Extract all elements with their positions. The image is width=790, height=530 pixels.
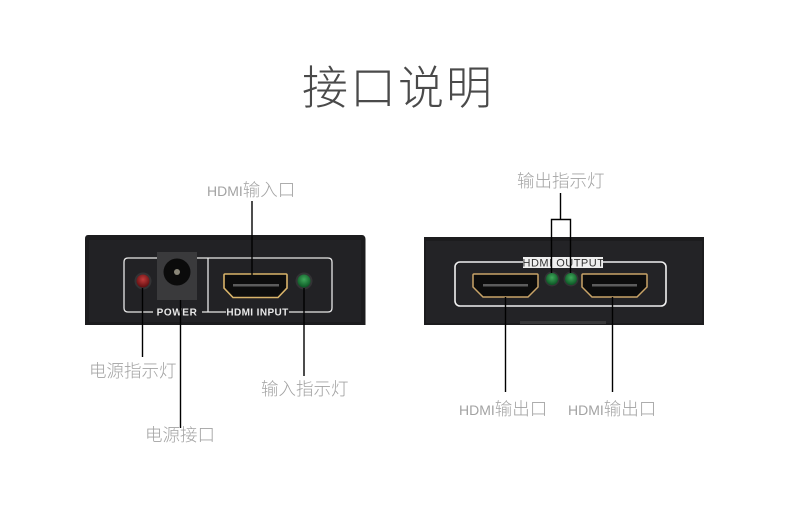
leader line: power LED bbox=[142, 288, 144, 357]
leader line: output port 2 bbox=[612, 297, 614, 392]
icon: HDMI output port 2 bbox=[582, 274, 647, 297]
panel outline bbox=[124, 258, 332, 312]
label: HDMI INPUT: HDMI INPUT bbox=[226, 308, 289, 318]
icon: HDMI output port 1 bbox=[473, 274, 538, 297]
icon: red power LED bbox=[134, 272, 152, 290]
icon: green input LED bbox=[296, 272, 312, 290]
label: HDMI OUTPUT: HDMI OUTPUT bbox=[523, 258, 604, 270]
leader bracket: output LEDs bbox=[552, 193, 570, 273]
icon: HDMI input port bbox=[224, 274, 287, 298]
icon: green output LED 1 bbox=[544, 272, 560, 286]
leader line: output port 1 bbox=[504, 297, 506, 392]
device face bbox=[89, 240, 361, 322]
leader line: HDMI input bbox=[251, 201, 253, 275]
label: power port: 电源接口 bbox=[145, 425, 215, 445]
device body bbox=[85, 235, 366, 325]
device body bbox=[424, 237, 704, 325]
leader line: power jack bbox=[180, 300, 182, 428]
panel: input side device bbox=[85, 235, 366, 325]
panel: output side device bbox=[424, 237, 704, 325]
leader line: input LED bbox=[303, 288, 305, 376]
panel outline bbox=[455, 262, 666, 306]
label: HDMI output port 1: HDMI输出口 bbox=[459, 399, 547, 419]
label: POWER: POWER bbox=[157, 308, 198, 318]
icon: power jack bbox=[157, 252, 197, 300]
label: HDMI input port: HDMI输入口 bbox=[207, 180, 295, 200]
bottom notch bbox=[520, 321, 606, 324]
label: output indicators: 输出指示灯 bbox=[517, 171, 604, 191]
title: 接口说明 bbox=[302, 62, 494, 114]
label: power indicator: 电源指示灯 bbox=[89, 361, 176, 381]
device face bbox=[426, 241, 702, 323]
label: HDMI output port 2: HDMI输出口 bbox=[568, 399, 656, 419]
icon: green output LED 2 bbox=[564, 272, 578, 286]
label: input indicator: 输入指示灯 bbox=[261, 379, 348, 399]
